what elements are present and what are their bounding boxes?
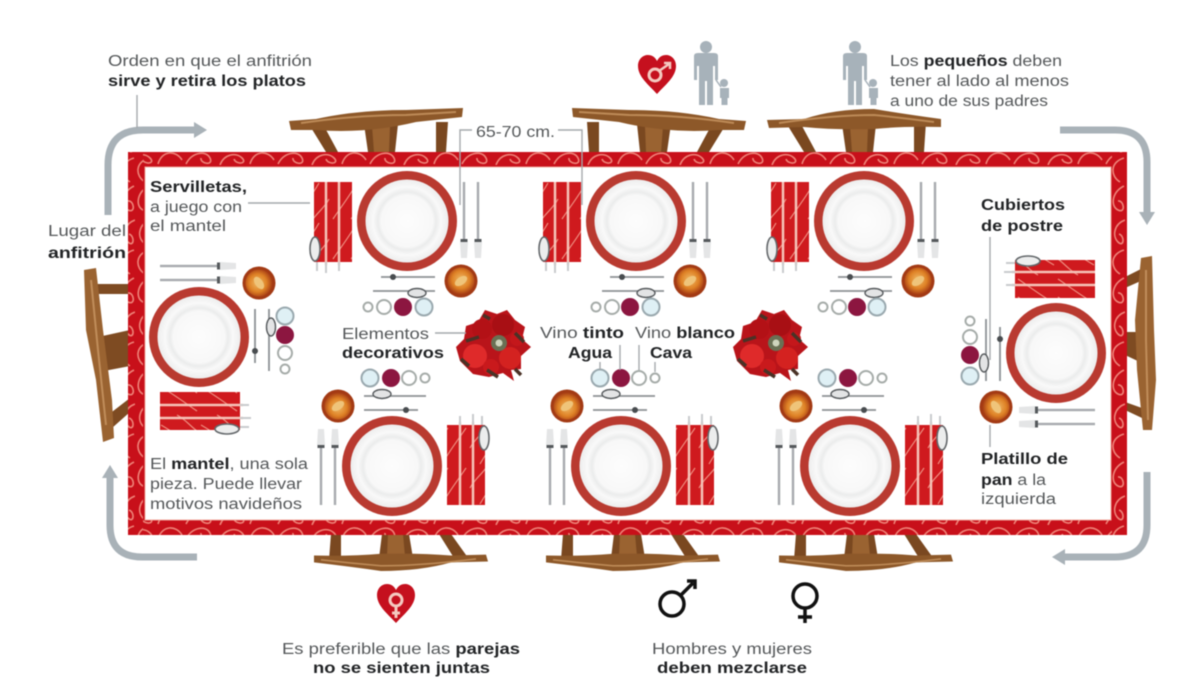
text: children: a uno de sus padres [890, 93, 1048, 110]
text: bread plate: Platillo de [981, 451, 1068, 468]
text: red wine and water: Vino tinto [540, 325, 624, 342]
icon: heart with female symbol [377, 584, 415, 623]
text: decorative elements [342, 326, 444, 362]
glasses: left [276, 308, 294, 374]
text: couples [282, 641, 520, 677]
text: couples: Es preferible que las parejas [282, 641, 520, 658]
text: dessert cutlery [981, 197, 1065, 235]
text: napkins: Servilletas, [150, 179, 247, 196]
text: men and women: Hombres y mujeres [652, 641, 812, 658]
text: host place: Lugar del [48, 223, 126, 240]
glasses: right [962, 316, 978, 384]
text: dessert cutlery: Cubiertos [981, 197, 1065, 214]
text: measurement: 65-70 cm. [476, 124, 555, 141]
place setting: left [149, 262, 276, 434]
icon: flower centrepiece left [456, 310, 531, 381]
text: napkins: el mantel [150, 218, 226, 235]
text: children [890, 53, 1069, 110]
icon: heart with male symbol [638, 55, 676, 94]
glasses: bottom row [362, 370, 886, 386]
icon: parents and child 2 [843, 41, 878, 105]
arrow: top right [1060, 130, 1155, 225]
text: tablecloth: El mantel , una sola [150, 456, 308, 473]
place setting: right [980, 256, 1106, 428]
icon: parents and child 1 [694, 41, 729, 105]
arrow: top left [108, 122, 207, 215]
chairs: bottom [314, 534, 953, 571]
text: bread plate: izquierda [981, 491, 1056, 508]
text: white wine and cava [635, 325, 735, 362]
icon: flower centrepiece right [733, 310, 808, 381]
icon: male symbol [660, 581, 695, 616]
text: decorative elements: Elementos [342, 326, 429, 343]
text: service order: sirve y retira los platos [108, 73, 306, 90]
text: decorative elements: decorativos [342, 345, 444, 362]
chairs: top [289, 108, 941, 152]
text: red wine and water: Agua [568, 345, 612, 362]
chair: left [84, 268, 130, 442]
text: tablecloth: pieza. Puede llevar [150, 476, 302, 493]
text: service order [108, 53, 312, 90]
chair: right [1125, 256, 1156, 430]
text: host place [48, 223, 126, 262]
text: bread plate: pan a la [981, 472, 1046, 489]
text: tablecloth: motivos navideños [150, 496, 302, 513]
text: service order: Orden en que el anfitrión [108, 53, 312, 70]
glasses: top row [364, 298, 886, 316]
text: red wine and water [540, 325, 624, 362]
arrow: bottom right [1052, 472, 1147, 565]
tablecloth [128, 152, 1127, 535]
text: men and women [652, 641, 812, 677]
text: white wine and cava: Vino blanco [635, 325, 735, 342]
arrow: bottom left [102, 465, 197, 557]
text: bread plate [981, 451, 1068, 508]
leader lines [137, 95, 990, 447]
text: napkins: a juego con [150, 199, 242, 216]
text: men and women: deben mezclarse [657, 660, 807, 677]
place settings: top row [310, 171, 939, 298]
text: dessert cutlery: de postre [981, 218, 1063, 235]
icon: female symbol [793, 584, 817, 623]
text: children: Los pequeños deben [890, 53, 1062, 70]
place settings: bottom row [317, 390, 947, 516]
text: children: tener al lado al menos [890, 73, 1069, 90]
text: couples: no se sienten juntas [313, 660, 490, 677]
text: white wine and cava: Cava [650, 345, 692, 362]
text: host place: anfitrión [48, 245, 126, 262]
text: tablecloth [150, 456, 308, 513]
text: napkins [150, 179, 247, 235]
